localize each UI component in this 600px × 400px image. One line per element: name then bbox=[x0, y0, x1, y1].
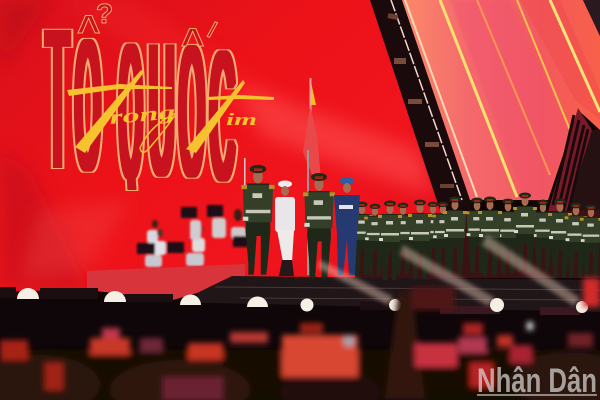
stage platform bbox=[87, 264, 600, 312]
lead soldiers bbox=[241, 165, 360, 279]
title: TỔ QUỐC: O bbox=[179, 9, 204, 215]
title: TỔ QUỐC: ^ bbox=[77, 8, 100, 52]
stage lamps bbox=[17, 288, 588, 313]
script title: Trong tim: rong bbox=[109, 101, 176, 129]
title: TỔ QUỐC: / bbox=[205, 17, 219, 43]
flag bbox=[244, 78, 322, 275]
title: TỔ QUỐC: ^ bbox=[181, 21, 204, 65]
panel: right LED screen with light stripes bbox=[402, 0, 600, 200]
title: TỔ QUỐC: O bbox=[75, 3, 100, 209]
title: TỔ QUỐC: U bbox=[149, 4, 174, 214]
panel: dark striped side block bbox=[547, 108, 600, 215]
script title: Trong tim: im bbox=[226, 110, 257, 129]
title: TỔ QUỐC: C bbox=[210, 14, 235, 218]
title: TỔ QUỐC bbox=[46, 0, 235, 218]
wall and light fixtures bbox=[0, 287, 600, 400]
soldiers formation bbox=[351, 192, 600, 280]
title: TỔ QUỐC: Q bbox=[120, 5, 142, 218]
panel: dark lighting truss bbox=[370, 0, 472, 232]
musicians bbox=[137, 205, 250, 267]
soldiers backdrop bbox=[355, 210, 600, 278]
light beams bbox=[318, 235, 580, 306]
script title: Trong tim bbox=[67, 70, 274, 153]
crowd with raised phones bbox=[0, 278, 600, 400]
